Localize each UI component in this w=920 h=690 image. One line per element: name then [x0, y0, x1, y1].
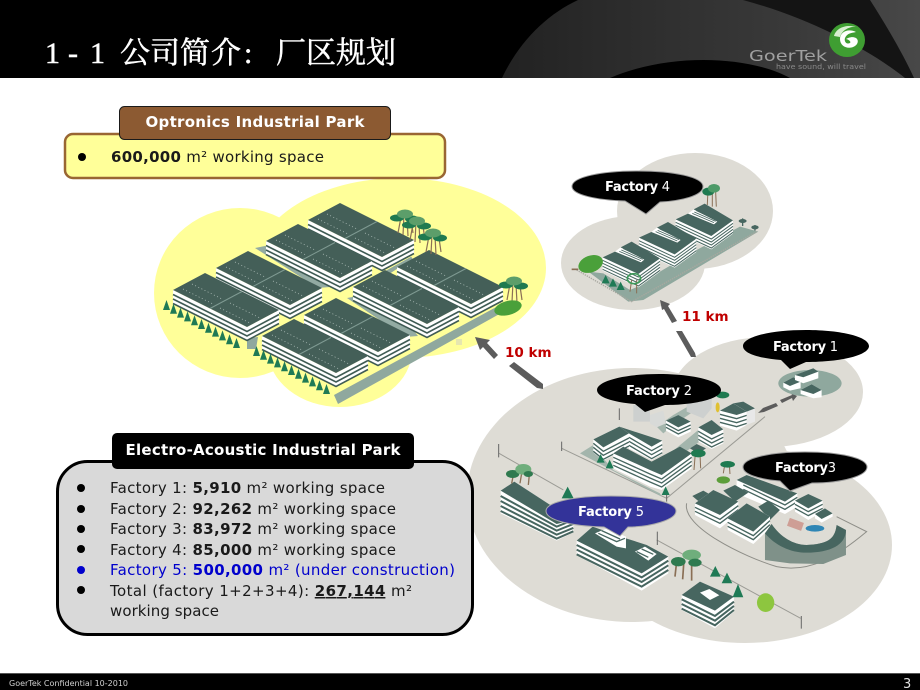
- callout: factory 5: [546, 496, 676, 536]
- callout: factory 5: Factory 5: [578, 505, 644, 520]
- illustration: factory 1 campus: [778, 368, 842, 398]
- factory 3: [692, 461, 846, 564]
- factory 2: [580, 392, 755, 497]
- fences: [499, 417, 801, 618]
- list: factory areas: Factory 5: 500,000 m² (under construction): [110, 561, 455, 579]
- arrow: factory 1 link: [758, 393, 797, 413]
- label: 11 km: 11 km: [682, 309, 729, 325]
- header swoosh: [502, 0, 920, 78]
- palms: [390, 210, 419, 236]
- heading: optronics: [120, 106, 390, 140]
- list: factory areas: [77, 479, 455, 620]
- header bar: [0, 0, 920, 78]
- title: 1-1公司简介:厂区规划: [45, 37, 396, 70]
- callout: factory 1: Factory 1: [773, 340, 838, 355]
- list: factory areas: Total (factory 1+2+3+4): 267,144 m²: [109, 582, 412, 600]
- panel: electro-acoustic industrial park: [58, 433, 472, 634]
- illustration: electro-acoustic main campus: [499, 392, 867, 629]
- label: 10 km: 10 km: [505, 345, 552, 361]
- callout: factory 1: [743, 330, 869, 369]
- panel: optronics industrial park: [65, 106, 445, 178]
- callout: factory 4: [572, 171, 703, 214]
- trees: [512, 473, 529, 485]
- callout: factory 3: Factory3: [775, 461, 836, 476]
- footer bar: [0, 673, 920, 690]
- arrow: 10 km: [475, 337, 543, 389]
- logo: GoerTek: [749, 23, 866, 71]
- list: factory areas: Factory 4: 85,000 m² working space: [110, 541, 396, 559]
- callout: factory 4: Factory 4: [605, 180, 670, 195]
- callout: factory 2: [597, 374, 721, 412]
- bullet: working space: 600,000 m² working space: [111, 148, 324, 166]
- heading: optronics: Optronics Industrial Park: [146, 113, 366, 131]
- factory 5 and neighbours: [501, 464, 774, 628]
- heading: electro-acoustic: [112, 433, 414, 469]
- bush: [493, 298, 523, 318]
- list: factory areas: Factory 2: 92,262 m² working space: [110, 500, 396, 518]
- site blob: factory 4: [561, 153, 773, 310]
- list: factory areas: Factory 1: 5,910 m² working space: [110, 479, 385, 497]
- logo: GoerTek: have sound, will travel: [776, 63, 866, 71]
- illustration: factory 4 campus: [572, 184, 759, 302]
- illustration: optronics park buildings: [163, 203, 528, 404]
- footer text: GoerTek Confidential 10-2010: [9, 679, 128, 688]
- callout: factory 3: [743, 452, 867, 491]
- logo: GoerTek: GoerTek: [749, 47, 827, 65]
- pine rows: [163, 300, 240, 348]
- arrow: 11 km: [660, 300, 696, 357]
- site blob: electro-acoustic park: [467, 337, 892, 643]
- site blob: optronics park: [154, 178, 546, 407]
- heading: electro-acoustic: Electro-Acoustic Industrial Park: [126, 441, 402, 459]
- list: factory areas: Factory 3: 83,972 m² working space: [110, 520, 396, 538]
- callout: factory 2: Factory 2: [626, 384, 692, 399]
- list: factory areas: working space: [110, 602, 219, 620]
